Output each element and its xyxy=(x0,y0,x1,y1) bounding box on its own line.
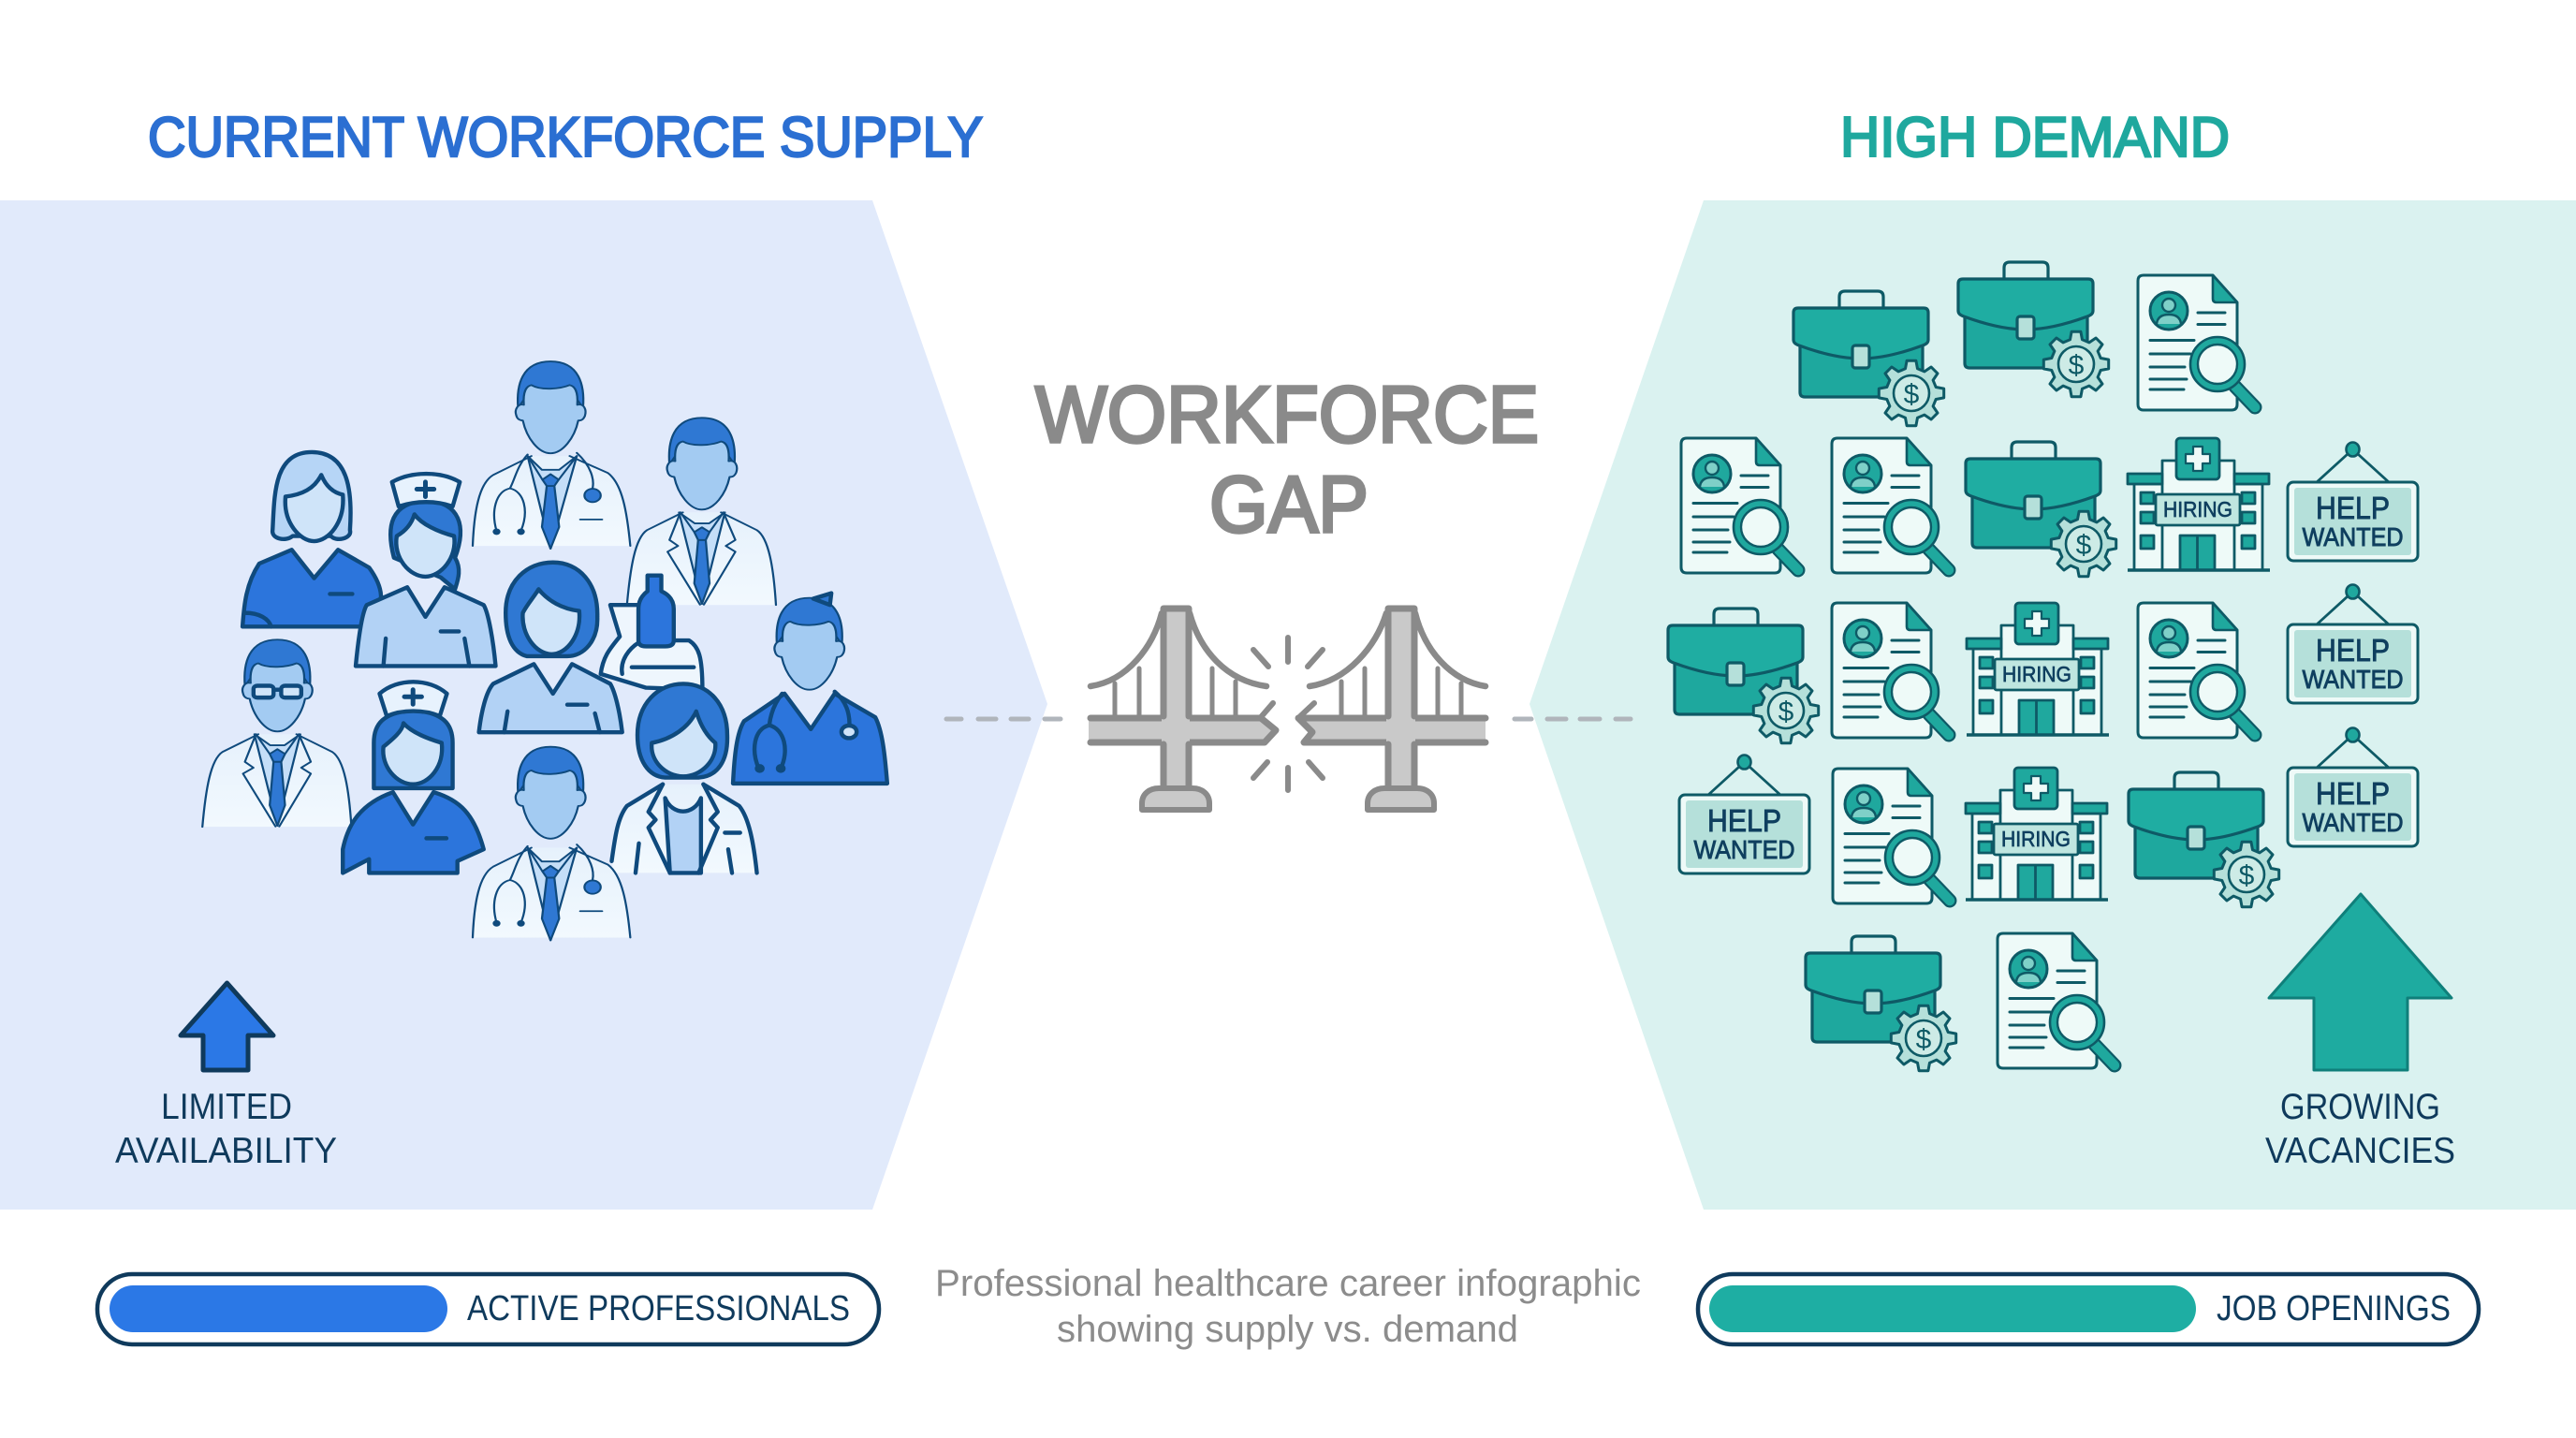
right bridge half xyxy=(1298,609,1486,810)
icon: hospital hiring 1: HIRING xyxy=(2163,497,2232,521)
person: doctor in coat, top right xyxy=(627,418,776,605)
legend bar: job openings: JOB OPENINGS xyxy=(2217,1289,2451,1328)
icon: briefcase 6 xyxy=(1806,936,1956,1071)
icon: briefcase 1: $ xyxy=(1904,379,1920,410)
icon: hospital hiring 3: HIRING xyxy=(2001,827,2071,851)
icon: help wanted sign 4: WANTED xyxy=(1694,835,1795,864)
icon: large teal up arrow xyxy=(2269,894,2452,1070)
icon: resume 5 xyxy=(2138,603,2255,738)
label: growing vacancies: GROWING xyxy=(2280,1087,2440,1127)
icon: help wanted sign 4: HELP xyxy=(1707,803,1781,838)
icon: resume 4 xyxy=(1832,603,1949,738)
heading: workforce gap: GAP xyxy=(1209,461,1368,550)
icon: help wanted sign 1: HELP xyxy=(2316,491,2390,525)
icon: briefcase 4 xyxy=(1668,609,1819,743)
icon: help wanted sign 1 xyxy=(2288,442,2418,561)
icon: briefcase 1 xyxy=(1793,291,1944,426)
legend bar: active professionals xyxy=(97,1274,879,1344)
icon: help wanted sign 3: WANTED xyxy=(2303,808,2404,837)
icon: resume 1 xyxy=(2138,275,2255,410)
icon: small blue up arrow xyxy=(181,983,273,1070)
legend bar: job openings xyxy=(1698,1274,2479,1344)
panel: demand background xyxy=(1530,200,2576,1210)
legend bar: active professionals: ACTIVE PROFESSIONALS xyxy=(467,1289,850,1328)
person: doctor with glasses xyxy=(202,639,351,827)
icon: resume 3 xyxy=(1832,438,1949,573)
icon: briefcase 3: $ xyxy=(2076,530,2092,561)
label: growing vacancies xyxy=(2265,1087,2455,1171)
icon: dashed connector left xyxy=(946,717,1061,721)
left bridge half xyxy=(1089,609,1276,810)
person: female doctor in coat xyxy=(611,683,757,873)
label: limited availability: AVAILABILITY xyxy=(115,1131,337,1171)
icon: briefcase 4: $ xyxy=(1778,697,1794,727)
icon: help wanted sign 2 xyxy=(2288,584,2418,703)
heading: workforce gap xyxy=(1035,371,1539,550)
icon: hospital hiring 3 xyxy=(1966,768,2108,900)
crack marks xyxy=(1253,638,1323,790)
person: doctor with stethoscope, bottom xyxy=(473,747,630,940)
icon: broken bridge xyxy=(1089,609,1486,810)
icon: help wanted sign 2: WANTED xyxy=(2303,665,2404,694)
icon: help wanted sign 4 xyxy=(1679,755,1809,873)
person: nurse in light scrubs xyxy=(356,474,495,666)
label: limited availability: LIMITED xyxy=(161,1087,292,1127)
heading: current workforce supply: CURRENT WORKFORCE SUPPLY xyxy=(148,106,983,169)
icon: hospital hiring 2: HIRING xyxy=(2002,662,2071,686)
icon: briefcase 2: $ xyxy=(2069,350,2085,381)
label: limited availability xyxy=(115,1087,337,1171)
person: female in blue scrubs xyxy=(242,452,381,626)
people group: healthcare professionals xyxy=(202,361,887,940)
icon: hospital hiring 2 xyxy=(1967,603,2109,735)
icon: help wanted sign 2: HELP xyxy=(2316,633,2390,668)
icon: briefcase 6: $ xyxy=(1916,1024,1932,1055)
icon: briefcase 3 xyxy=(1966,442,2116,577)
caption: Professional healthcare career infographic xyxy=(935,1263,1641,1304)
icon: help wanted sign 1: WANTED xyxy=(2303,522,2404,551)
icon: briefcase 5 xyxy=(2129,772,2279,907)
icon: help wanted sign 3 xyxy=(2288,728,2418,846)
icon: resume 6 xyxy=(1833,769,1950,903)
heading: workforce gap: WORKFORCE xyxy=(1035,371,1539,460)
label: growing vacancies: VACANCIES xyxy=(2265,1131,2455,1171)
icon: resume 7 xyxy=(1998,933,2115,1068)
icon: briefcase 5: $ xyxy=(2239,860,2255,891)
caption xyxy=(935,1263,1641,1350)
icon: resume 2 xyxy=(1681,438,1798,573)
icon: hospital hiring 1 xyxy=(2128,438,2270,570)
panel: supply background xyxy=(0,200,1047,1210)
icon: help wanted sign 3: HELP xyxy=(2316,776,2390,811)
heading: high demand: HIGH DEMAND xyxy=(1840,106,2230,169)
person: nurse in blue scrubs xyxy=(343,682,484,873)
person: male scrubs with stethoscope xyxy=(733,594,887,784)
person: female centre xyxy=(479,563,622,732)
caption: showing supply vs. demand xyxy=(1057,1309,1518,1350)
icon: dashed connector right xyxy=(1515,717,1631,721)
person: hand holding bottle xyxy=(601,576,702,690)
icon: briefcase 2 xyxy=(1958,262,2109,397)
person: doctor with stethoscope, top xyxy=(473,361,630,549)
